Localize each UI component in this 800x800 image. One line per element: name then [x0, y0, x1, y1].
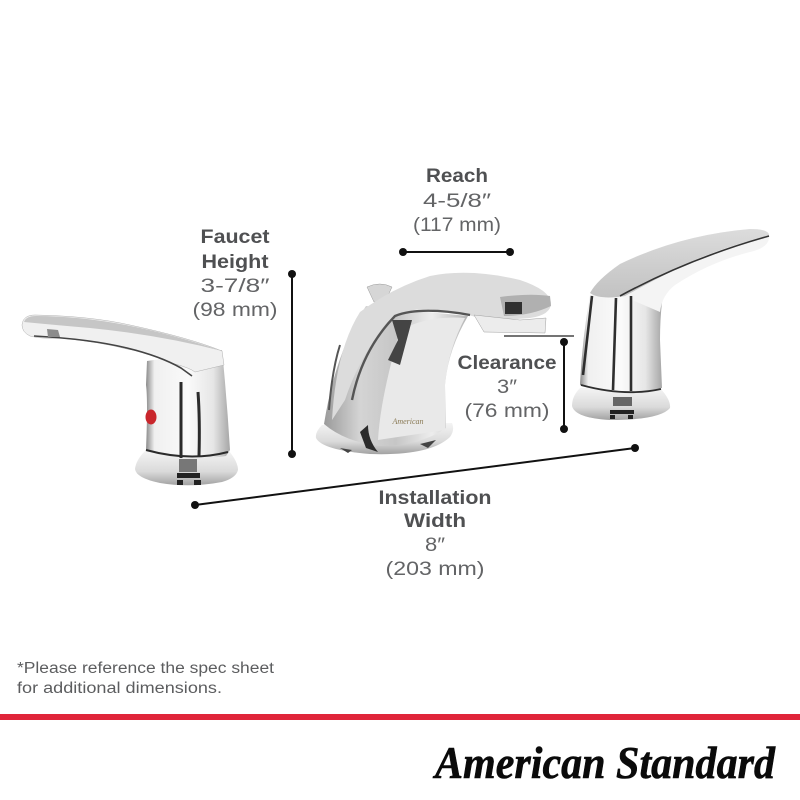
red hot indicator: [146, 410, 156, 424]
label: clearance: (76 mm): [464, 400, 550, 422]
spout body: [324, 306, 468, 446]
label: clearance: Clearance: [458, 352, 557, 374]
footnote: [17, 660, 275, 697]
label: installation width: [378, 487, 492, 580]
footnote: for additional dimensions.: [17, 680, 222, 697]
right handle lever: [590, 229, 769, 312]
brand logo: American Standard: [432, 737, 776, 788]
label: reach: Reach: [426, 165, 488, 187]
dimension: faucet height line: [288, 270, 296, 458]
pop-up lever: [367, 284, 392, 302]
dimension: reach line: [399, 248, 514, 256]
left handle: [22, 315, 238, 485]
label: faucet height: (98 mm): [192, 299, 278, 321]
left handle base: [135, 451, 238, 485]
spout base: [316, 423, 453, 454]
red divider: [0, 714, 800, 720]
left handle lever: [22, 315, 224, 372]
label: reach: (117 mm): [413, 214, 501, 236]
centre spout: [316, 273, 551, 454]
label: reach: 4-5/8″: [423, 190, 491, 212]
label: faucet height: 3-7/8″: [200, 275, 270, 297]
spout head: [332, 273, 551, 420]
label: clearance: [458, 352, 557, 422]
right handle body: [580, 290, 662, 391]
right handle base: [572, 388, 670, 420]
footnote: *Please reference the spec sheet: [17, 660, 275, 677]
label: faucet height: Height: [202, 251, 269, 273]
label: faucet height: Faucet: [200, 226, 270, 248]
dimension: clearance line: [504, 336, 574, 433]
label: installation width: Installation: [378, 487, 492, 509]
left handle body: [146, 350, 230, 458]
label: clearance: 3″: [497, 376, 517, 398]
label: installation width: (203 mm): [386, 558, 484, 580]
dimension: installation width line: [191, 444, 639, 509]
label: reach: [413, 165, 501, 236]
spout logo: American: [391, 417, 424, 426]
label: faucet height: [192, 226, 278, 321]
label: installation width: 8″: [425, 534, 445, 556]
right handle: [572, 229, 769, 420]
label: installation width: Width: [404, 510, 466, 532]
